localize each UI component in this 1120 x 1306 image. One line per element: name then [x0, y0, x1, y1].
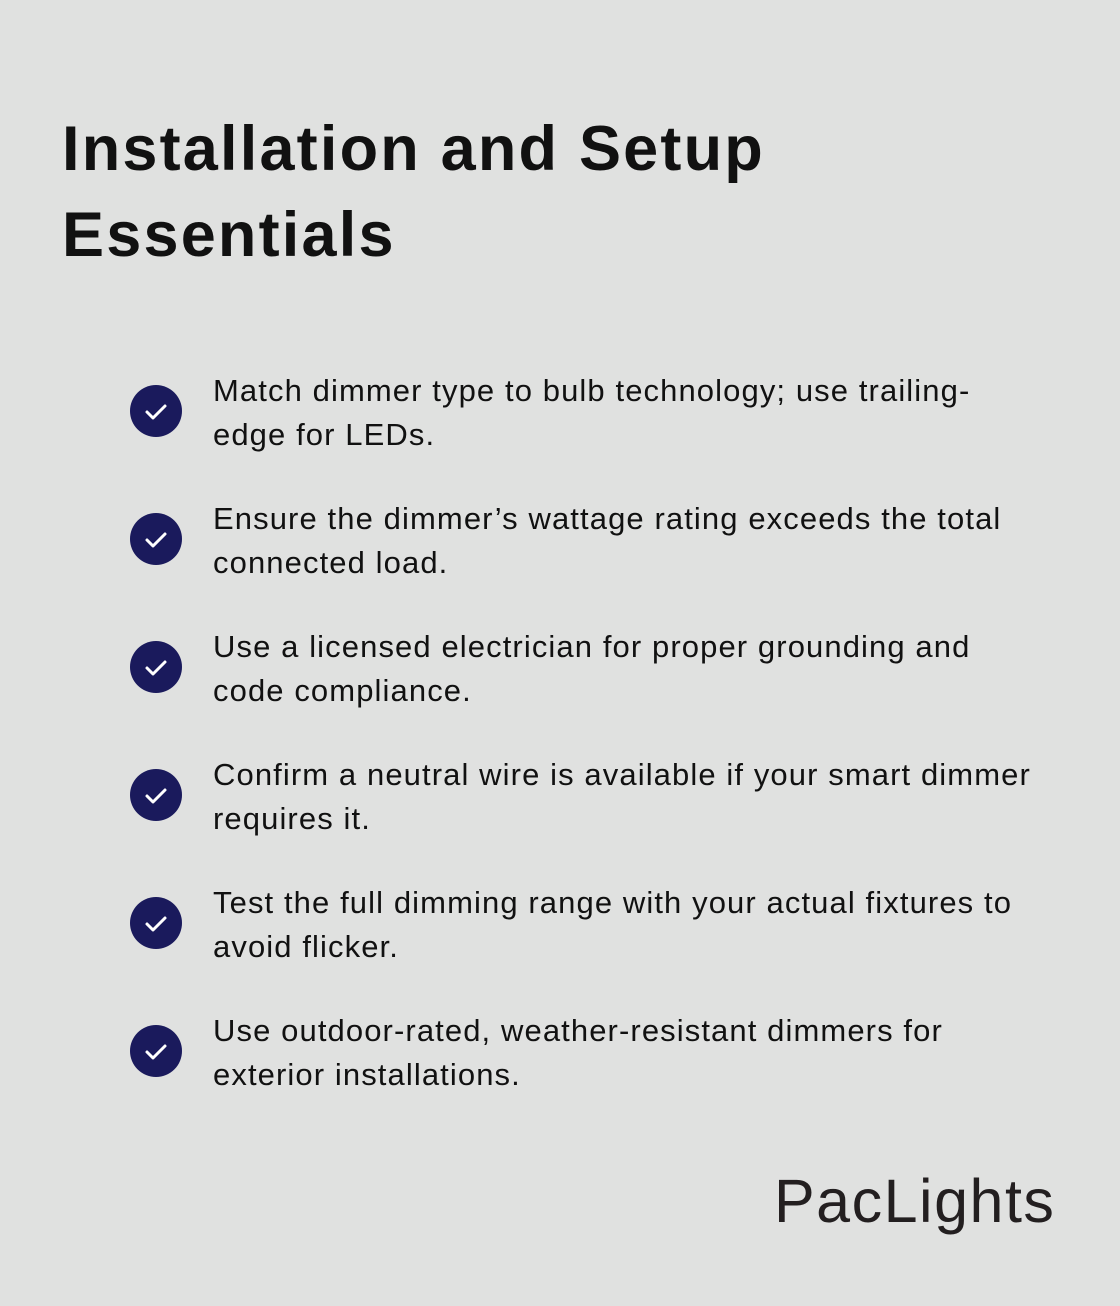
item 4: [130, 757, 1031, 836]
item 1: [130, 373, 970, 452]
text 5: avoid flicker.: [213, 929, 399, 964]
item 5: [130, 885, 1012, 964]
text 1: [213, 373, 970, 452]
text 2: [213, 501, 1001, 580]
item 2: [130, 501, 1001, 580]
text 6: [213, 1013, 943, 1092]
text 3: [213, 629, 970, 708]
item 6: [130, 1013, 943, 1092]
icon: check: [130, 513, 182, 565]
text 2: connected load.: [213, 545, 448, 580]
text 4: requires it.: [213, 801, 371, 836]
text 6: Use outdoor-rated, weather-resistant dimmers for: [213, 1013, 943, 1048]
icon: check: [130, 1025, 182, 1077]
text 2: Ensure the dimmer’s wattage rating exceeds the total: [213, 501, 1001, 536]
text 4: [213, 757, 1031, 836]
text 1: Match dimmer type to bulb technology; use trailing-: [213, 373, 970, 408]
text 5: Test the full dimming range with your actual fixtures to: [213, 885, 1012, 920]
item 3: [130, 629, 970, 708]
text 5: [213, 885, 1012, 964]
title: Installation and Setup: [62, 114, 765, 184]
icon: check: [130, 897, 182, 949]
text 4: Confirm a neutral wire is available if your smart dimmer: [213, 757, 1031, 792]
text 3: Use a licensed electrician for proper grounding and: [213, 629, 970, 664]
icon: check: [130, 769, 182, 821]
icon: check: [130, 385, 182, 437]
text 6: exterior installations.: [213, 1057, 521, 1092]
icon: check: [130, 641, 182, 693]
text 3: code compliance.: [213, 673, 472, 708]
text 1: edge for LEDs.: [213, 417, 435, 452]
logo: PacLights: [774, 1167, 1055, 1235]
title: Essentials: [62, 200, 396, 270]
title: [62, 114, 765, 270]
